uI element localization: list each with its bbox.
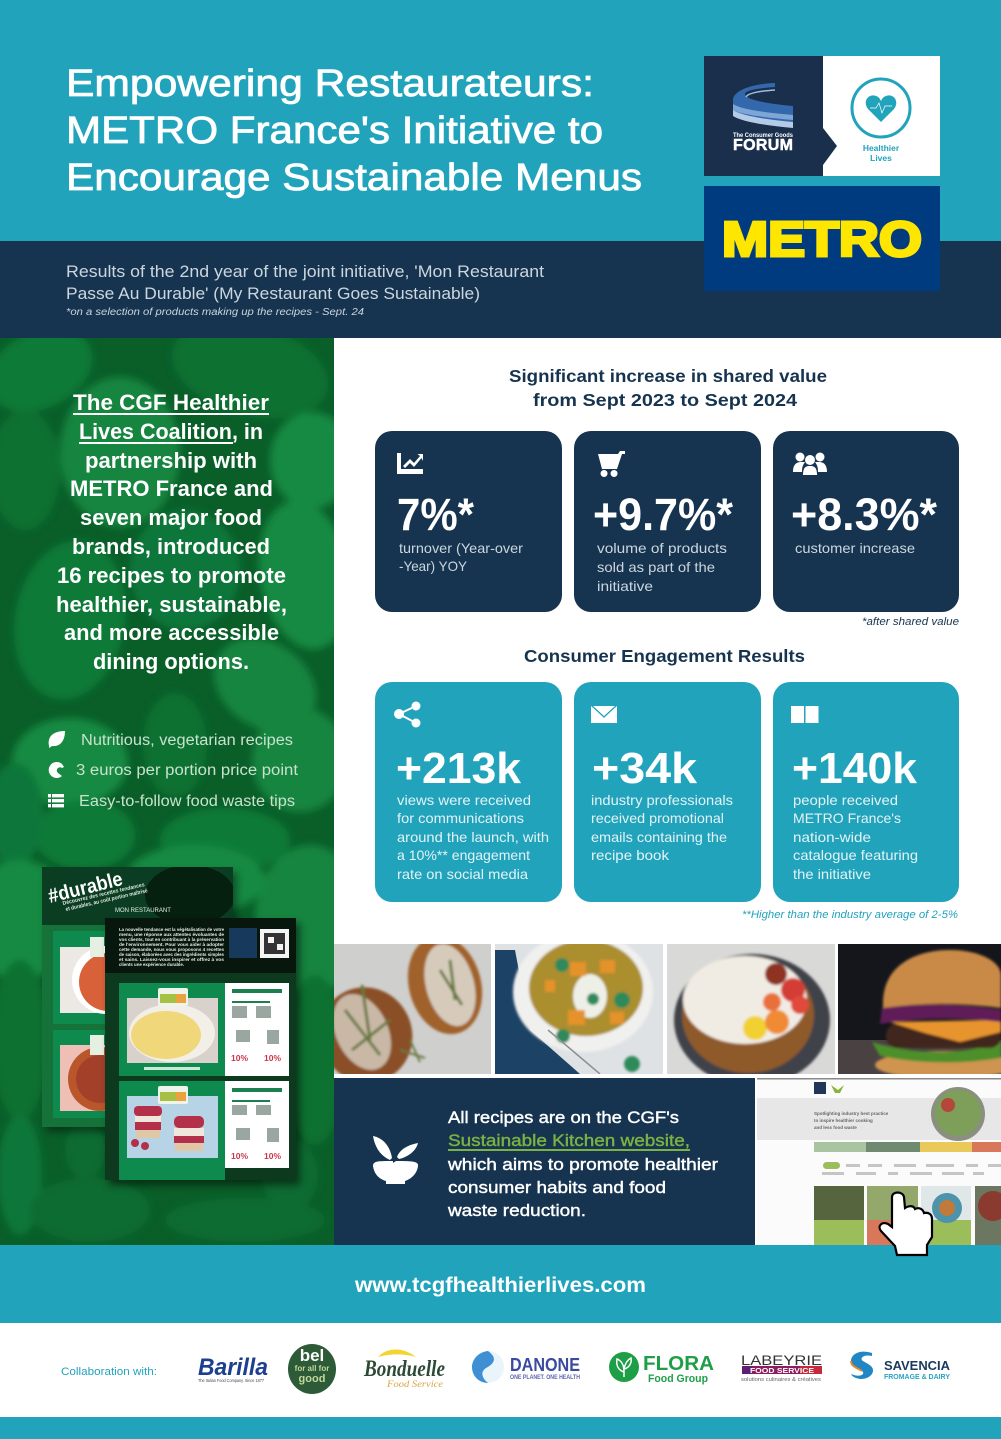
recipe book: front page: menu, une réponse aux attentes évoluantes de: [119, 932, 224, 937]
recipe book: front page: et sains. Laissez-vous inspirer et offrez à vos: [119, 957, 224, 962]
icon: cart: [598, 451, 625, 477]
heading: consumer engagement: Consumer Engagement Results: [524, 646, 805, 666]
intro text: The CGF Healthier: [73, 390, 269, 415]
footer URL: www.tcgfhealthierlives.com: [354, 1274, 646, 1297]
photo: lentil bowl: [495, 932, 663, 1074]
title: Empowering Restaurateurs:: [66, 63, 594, 105]
intro text: dining options.: [93, 649, 249, 674]
icon: plant bowl: [373, 1136, 418, 1184]
card: catalogue: the initiative: [793, 866, 871, 882]
card: views: views were received: [397, 792, 531, 808]
recipe book: front page: de l'environnement. Pour vous aider à adopter: [119, 942, 224, 947]
card: professionals: +34k: [592, 744, 698, 793]
logo: Bonduelle: Food Service: [386, 1379, 443, 1389]
intro text: Lives Coalition, in: [79, 419, 263, 444]
logo: Healthier Lives: Lives: [870, 153, 892, 163]
logo: Bel: bel: [300, 1346, 324, 1365]
card: volume: sold as part of the: [597, 559, 715, 575]
recipe book: front page: 10%: [264, 1053, 281, 1063]
intro text: healthier, sustainable,: [56, 592, 287, 617]
collaboration label: Collaboration with:: [61, 1366, 157, 1378]
card: turnover: [375, 431, 562, 612]
bullet list: [48, 731, 299, 810]
card: volume: [574, 431, 761, 612]
logo: Healthier Lives: Healthier: [863, 143, 900, 153]
recipe book: front page: 10%: [231, 1053, 248, 1063]
card: customers: +8.3%*: [791, 489, 937, 540]
photo: burger: [838, 944, 1001, 1079]
card: catalogue: METRO France's: [793, 810, 901, 826]
heading: shared value: Significant increase in shared value: [509, 366, 827, 386]
card: catalogue: [773, 682, 959, 902]
bullet: price point: 3 euros per portion price point: [76, 762, 299, 779]
logo: Flora Food Group: FLORA: [643, 1353, 714, 1375]
website screenshot: [757, 1078, 1001, 1245]
logo: Bonduelle: [363, 1349, 445, 1389]
recipe book: front page: La nouvelle tendance est la végétalisation de votre: [119, 927, 224, 932]
icon: pointer hand: [880, 1192, 932, 1255]
callout text: All recipes are on the CGF's: [448, 1109, 679, 1127]
icon: chart: [397, 453, 423, 474]
intro text: 16 recipes to promote: [57, 563, 286, 588]
callout text: consumer habits and food: [448, 1179, 666, 1197]
logo: Labeyrie Food Service: LABEYRIE: [741, 1352, 822, 1368]
icon: share: [395, 702, 420, 726]
logo: Danone: ONE PLANET. ONE HEALTH: [510, 1375, 580, 1381]
logo: Danone: [472, 1351, 580, 1383]
card: volume: initiative: [597, 578, 653, 594]
card: customers: customer increase: [795, 540, 915, 556]
card: volume: volume of products: [597, 540, 727, 556]
icon: leaf: [49, 731, 65, 748]
website screenshot: to inspire healthier cooking: [814, 1118, 873, 1123]
icon: people: [793, 452, 827, 475]
footnote: industry average: **Higher than the industry average of 2-5%: [742, 909, 958, 921]
subtitle: *on a selection of products making up the recipes - Sept. 24: [66, 307, 364, 318]
recipe book: back page: [42, 865, 237, 1132]
card: volume: +9.7%*: [593, 489, 733, 540]
card: professionals: industry professionals: [591, 792, 733, 808]
callout text: waste reduction.: [447, 1202, 586, 1220]
logo: Barilla: Barilla: [198, 1354, 268, 1381]
card: turnover: 7%*: [397, 489, 474, 540]
website screenshot: and less food waste: [814, 1125, 857, 1130]
logo: Bel: for all for: [295, 1364, 329, 1373]
title: METRO France's Initiative to: [66, 110, 603, 152]
card: views: +213k: [396, 744, 522, 793]
intro text: [56, 390, 287, 674]
recipe book: back page: MON RESTAURANT: [115, 908, 171, 914]
callout text: which aims to promote healthier: [447, 1156, 719, 1174]
logo: Labeyrie Food Service: FOOD SERVICE: [750, 1366, 814, 1375]
footnote: shared value: *after shared value: [862, 616, 959, 628]
logo: Barilla: The Italian Food Company. Since 1877: [198, 1378, 264, 1383]
icon: list: [48, 794, 64, 807]
recipe book: front page: [105, 918, 300, 1185]
logo: The Consumer Goods Forum: FORUM: [733, 137, 793, 154]
card: catalogue: people received: [793, 792, 898, 808]
icon: book: [791, 706, 818, 723]
logo: Flora Food Group: Food Group: [648, 1373, 708, 1385]
subtitle: Passe Au Durable' (My Restaurant Goes Sustainable): [66, 285, 480, 303]
logo: Savencia: FROMAGE & DAIRY: [884, 1372, 950, 1381]
bullet: food waste tips: Easy-to-follow food waste tips: [79, 793, 295, 810]
logo: Labeyrie Food Service: [741, 1352, 822, 1383]
intro text: seven major food: [80, 505, 262, 530]
card: catalogue: +140k: [792, 744, 918, 793]
recipe book: back page: et durables, au coût portion maîtrisé: [65, 888, 148, 913]
card: views: rate on social media: [397, 866, 528, 882]
photo: carrot cake: [667, 944, 835, 1086]
logo: Danone: DANONE: [510, 1355, 580, 1375]
intro text: METRO France and: [70, 476, 273, 501]
card: catalogue: catalogue featuring: [793, 847, 918, 863]
recipe book: back page: #durable: [46, 868, 125, 908]
title: Encourage Sustainable Menus: [66, 157, 642, 199]
website screenshot: Spotlighting industry best practice: [814, 1111, 889, 1116]
recipe book: front page: 10%: [264, 1151, 281, 1161]
heading: shared value: from Sept 2023 to Sept 2024: [533, 390, 797, 410]
logo: The Consumer Goods Forum: The Consumer Goods: [733, 132, 793, 139]
logo: METRO: [704, 186, 940, 291]
heading: shared value: [509, 366, 827, 410]
logo: Healthier Lives: [823, 56, 940, 176]
recipe book: front page: cette demande, nous vous proposons 4 recettes: [119, 947, 224, 952]
subtitle: [66, 263, 544, 318]
card: catalogue: nation-wide: [793, 829, 871, 845]
recipe book: front page: vos clients, tout en contribuant à la préservation: [119, 937, 224, 942]
partner strip: [0, 1323, 1001, 1417]
icon: coin: [49, 762, 64, 778]
recipe book: front page: 10%: [231, 1151, 248, 1161]
recipe book: front page: de saison, élaborées avec des ingrédients simples: [119, 952, 224, 957]
callout text: Sustainable Kitchen website,: [448, 1132, 690, 1150]
logo: METRO: METRO: [722, 213, 922, 267]
bullet: vegetarian recipes: Nutritious, vegetarian recipes: [81, 732, 293, 749]
logo: Labeyrie Food Service: solutions culinaires & créatives: [741, 1377, 822, 1383]
card: professionals: recipe book: [591, 847, 670, 863]
recipe book: front page: clients une expérience durable.: [119, 962, 184, 967]
logo: Savencia: SAVENCIA: [884, 1358, 951, 1373]
logo: Bel: [288, 1344, 336, 1394]
card: turnover: turnover (Year-over: [399, 540, 523, 556]
logo: Bel: good: [299, 1373, 325, 1385]
intro text: partnership with: [85, 448, 257, 473]
card: views: around the launch, with: [397, 829, 549, 845]
card: professionals: [574, 682, 761, 902]
footer band: [0, 1245, 1001, 1323]
title: [66, 63, 642, 199]
icon: envelope: [591, 705, 617, 723]
logo: Savencia: [851, 1352, 951, 1381]
card: views: a 10%** engagement: [397, 847, 530, 863]
panel: basil background: [0, 338, 334, 1245]
header band: [0, 0, 1001, 338]
subtitle: Results of the 2nd year of the joint initiative, 'Mon Restaurant: [66, 263, 544, 281]
card: customers: [773, 431, 959, 612]
logo: Bonduelle: Bonduelle: [363, 1356, 445, 1381]
intro text: brands, introduced: [72, 534, 270, 559]
card: views: [375, 682, 562, 902]
photo: baked potatoes: [334, 944, 491, 1074]
panel: Sustainable Kitchen callout: [334, 1078, 755, 1245]
card: views: for communications: [397, 810, 524, 826]
card: professionals: received promotional: [591, 810, 724, 826]
logo: Flora Food Group: [609, 1352, 714, 1385]
recipe book: back page: Découvrez des recettes tendances: [62, 882, 145, 907]
bottom band: [0, 1417, 1001, 1439]
callout text: [447, 1109, 719, 1220]
card: turnover: -Year) YOY: [399, 558, 468, 574]
intro text: and more accessible: [64, 620, 279, 645]
card: professionals: emails containing the: [591, 829, 727, 845]
logo: The Consumer Goods Forum: [704, 56, 823, 176]
